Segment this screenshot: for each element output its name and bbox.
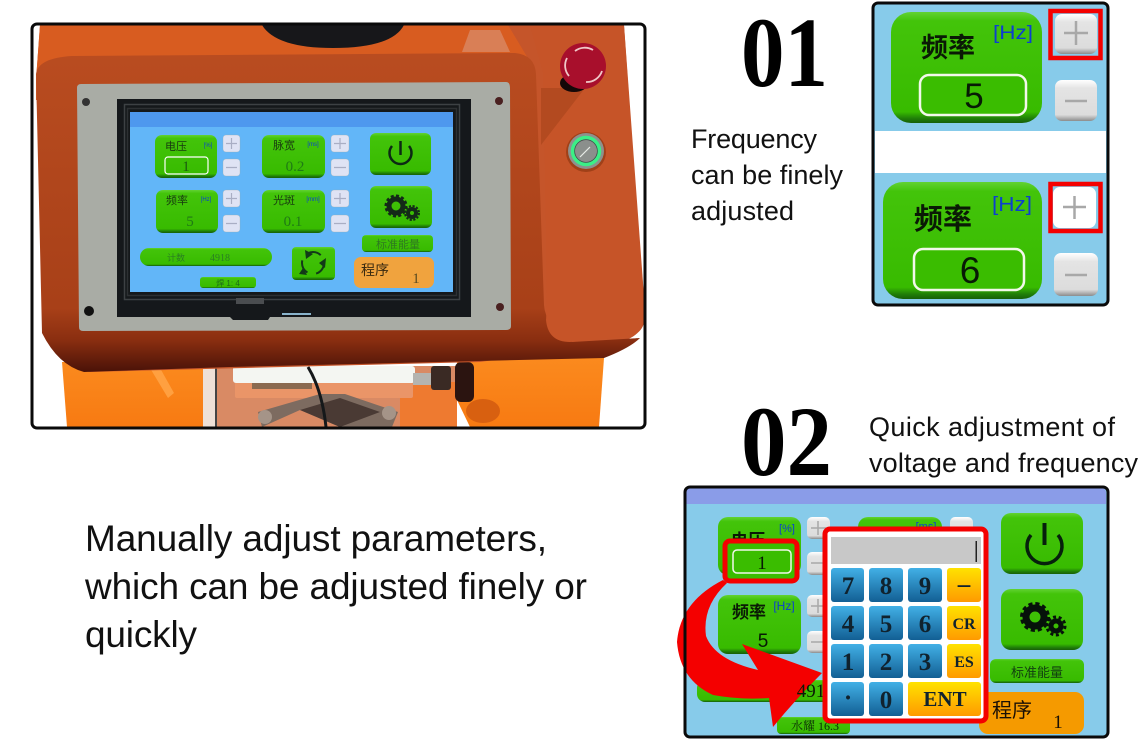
orange housing (36, 25, 645, 372)
text: quick adjustment caption (869, 412, 1138, 478)
frequency tile: 5 (186, 214, 194, 230)
pressed plus button with red highlight (1050, 184, 1100, 231)
program button (979, 692, 1084, 734)
frequency tile, value 5: 5 (964, 77, 984, 116)
number keys: 6 (919, 611, 931, 638)
number keys: 0 (880, 687, 892, 714)
program button: 程序 (992, 699, 1032, 722)
pulse width tile: [ms] (307, 142, 319, 148)
frequency tile, value 5 (891, 12, 1042, 123)
frequency tile, value 6: [Hz] (992, 194, 1032, 216)
number keys: 8 (880, 573, 892, 600)
red highlight on voltage field (725, 541, 797, 581)
grey mounting plate (77, 82, 511, 331)
frequency tile, value 5: 频率 (921, 33, 975, 63)
spot size tile: 0.1 (284, 214, 302, 230)
small status bar: 水耀 16.3 (791, 718, 839, 733)
text: main description (84, 518, 587, 655)
text: main description: quickly (85, 614, 198, 655)
spot size tile: 光斑 (273, 193, 295, 207)
spot size tile: [mm] (306, 197, 320, 203)
function keys (908, 568, 981, 716)
number keys: 5 (880, 611, 892, 638)
number keys: 9 (919, 573, 931, 600)
pulse width tile (262, 135, 325, 178)
function keys: – (957, 571, 971, 598)
number keys: 1 (842, 649, 854, 676)
pulse width tile (858, 517, 942, 526)
counter bar (697, 680, 830, 702)
plus and minus buttons (807, 517, 973, 653)
frequency tile, value 6: 频率 (914, 203, 972, 236)
spot size tile (262, 190, 325, 233)
frequency tile, value 6 (883, 182, 1042, 299)
power button (370, 133, 431, 175)
voltage tile (718, 517, 801, 575)
text: main description: Manually adjust parameters, (85, 518, 547, 559)
machine legs (62, 358, 604, 427)
program button: 1 (1053, 712, 1063, 733)
emergency stop button (560, 43, 606, 92)
plus button with red highlight (1050, 11, 1100, 58)
settings button (370, 186, 432, 228)
screen bezel (117, 99, 471, 320)
text: frequency caption: adjusted (691, 196, 794, 226)
pulse width tile: 脉宽 (273, 138, 295, 152)
standard energy button (990, 659, 1084, 683)
frequency tile (718, 595, 801, 654)
function keys: CR (952, 616, 976, 633)
standard energy button (362, 235, 433, 252)
frequency tile (156, 190, 218, 233)
red highlight on voltage field: 1 (757, 553, 767, 574)
heading: 02: 02 (741, 386, 832, 497)
standard energy button: 标准能量 (1011, 665, 1063, 680)
counter bar: 计数 (167, 252, 185, 263)
power button (1001, 513, 1083, 574)
voltage tile: [%] (204, 143, 213, 149)
text: frequency caption: Frequency (691, 124, 818, 154)
settings button (1001, 589, 1083, 650)
frequency tile: 5 (758, 631, 768, 652)
minus button (1054, 253, 1098, 296)
frequency tile: 频率 (732, 602, 766, 622)
function keys: ENT (923, 687, 967, 711)
counter bar: 4918 (210, 253, 230, 264)
number keys: · (844, 685, 852, 712)
input display (831, 537, 981, 564)
plus and minus buttons (223, 135, 349, 232)
counter bar (140, 248, 272, 266)
voltage tile: 电压 (165, 140, 187, 153)
panel: quick adjustment screen (677, 487, 1108, 737)
function keys: ES (954, 654, 974, 671)
program button (354, 257, 434, 288)
voltage tile (155, 135, 217, 178)
frequency tile, value 5: [Hz] (993, 23, 1033, 44)
text: main description: which can be adjusted finely or (84, 566, 587, 607)
voltage tile: 电压 (731, 531, 765, 550)
program button: 程序 (361, 262, 389, 278)
text: quick adjustment caption: voltage and frequency (869, 448, 1138, 478)
small status bar: 焊 1: 4 (216, 278, 240, 288)
number keys: 7 (842, 573, 854, 600)
voltage tile: [%] (779, 523, 795, 535)
pulse width tile: 0.2 (286, 159, 304, 175)
pulse width tile: [ms] (916, 521, 936, 533)
voltage tile: 1 (182, 159, 190, 175)
number keys: 2 (880, 649, 892, 676)
counter value: 491 (797, 681, 825, 702)
frequency tile: [Hz] (773, 599, 795, 613)
power indicator button (566, 132, 606, 172)
small status bar (777, 717, 850, 734)
numeric keypad (825, 529, 986, 721)
red curved arrow (677, 580, 822, 727)
number keys: 4 (842, 611, 855, 638)
standard energy button: 标准能量 (376, 237, 420, 251)
small status bar (200, 277, 256, 288)
minus button (1055, 80, 1097, 121)
text: frequency caption (691, 124, 844, 226)
number keys: 3 (919, 649, 931, 676)
photo frame (32, 24, 645, 428)
text: frequency caption: can be finely (691, 160, 844, 190)
panel: fine frequency adjustment (873, 3, 1108, 305)
photo: laser machine with touchscreen (33, 25, 645, 427)
frequency tile: [Hz] (201, 197, 212, 203)
program button: 1 (412, 271, 420, 287)
black lens tube (262, 25, 404, 48)
text: quick adjustment caption: Quick adjustment of (869, 412, 1115, 442)
heading: 01: 01 (741, 0, 828, 108)
touchscreen display (130, 112, 453, 292)
number keys (831, 568, 942, 716)
frequency tile: 频率 (166, 193, 188, 207)
cycle button (292, 247, 335, 280)
frequency tile, value 6: 6 (960, 250, 980, 291)
machine stage and knob (233, 362, 474, 427)
